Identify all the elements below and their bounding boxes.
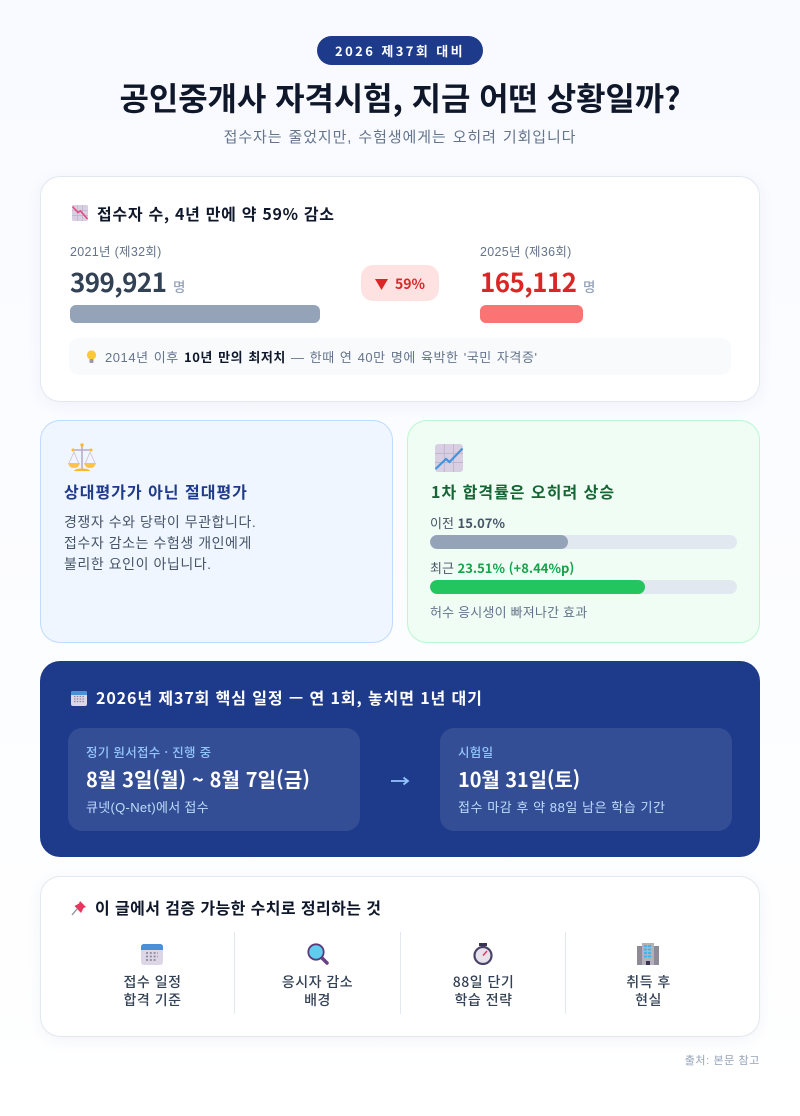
panel: pass rate xyxy=(407,420,760,643)
date: 10월 31일(토) xyxy=(458,764,580,793)
label: 2021: 2021년 (제32회) xyxy=(70,245,162,259)
icon: office building xyxy=(637,943,659,965)
value: 59%: 59% xyxy=(395,274,425,294)
date: 8월 3일(월) ~ 8월 7일(금) xyxy=(86,764,310,793)
icon: down triangle xyxy=(375,279,388,290)
bar fill: recent xyxy=(430,580,645,594)
icon: chart decreasing xyxy=(72,205,88,221)
label: 시험일 xyxy=(458,742,493,761)
label: recent: 최근 23.51% (+8.44%p) xyxy=(430,558,574,577)
detail: 큐넷(Q-Net)에서 접수 xyxy=(86,800,209,815)
heading: 이 글에서 검증 가능한 수치로 정리하는 것 xyxy=(95,895,381,919)
label xyxy=(453,972,514,1010)
label: 취득 후 xyxy=(626,972,671,992)
item: background xyxy=(235,932,401,1014)
source note: 출처: 본문 참고 xyxy=(685,1055,760,1067)
body text: 불리한 요인이 아닙니다. xyxy=(64,556,212,572)
body text: 경쟁자 수와 당락이 무관합니다. xyxy=(64,514,256,530)
box: application xyxy=(68,728,360,831)
icon: chart increasing xyxy=(435,444,463,472)
heading: 2026년 제37회 핵심 일정 — 연 1회, 놓치면 1년 대기 xyxy=(96,685,483,709)
panel: absolute evaluation xyxy=(40,420,393,643)
box: exam day xyxy=(440,728,732,831)
heading: 상대평가가 아닌 절대평가 xyxy=(64,479,248,503)
body text: 접수자 감소는 수험생 개인에게 xyxy=(64,535,252,551)
label xyxy=(124,972,181,1010)
label: 응시자 감소 xyxy=(282,972,353,992)
note text: 2014년 이후 10년 만의 최저치 — 한때 연 40만 명에 육박한 '국민 자격증' xyxy=(105,347,537,366)
icon: balance scale xyxy=(68,443,96,471)
label: 현실 xyxy=(635,990,662,1010)
note: 허수 응시생이 빠져나간 효과 xyxy=(430,605,587,620)
bar: 2021 xyxy=(70,305,320,323)
change badge xyxy=(361,265,439,301)
item: reality xyxy=(626,943,671,1010)
label: 학습 전략 xyxy=(455,990,512,1010)
heading: 1차 합격률은 오히려 상승 xyxy=(431,479,615,503)
badge: 2026 제37회 대비: 2026 제37회 대비 xyxy=(335,41,465,60)
panel: topics xyxy=(40,876,760,1037)
icon: calendar xyxy=(141,944,163,965)
arrow xyxy=(391,776,410,786)
note xyxy=(69,338,731,375)
bar: 2025 xyxy=(480,305,583,323)
badge: 2026 제37회 대비 xyxy=(317,36,483,65)
item: schedule xyxy=(70,932,235,1014)
panel: applicant decline xyxy=(40,176,760,402)
subtitle: 접수자는 줄었지만, 수험생에게는 오히려 기회입니다 xyxy=(224,129,576,146)
label: previous: 이전 15.07% xyxy=(430,513,505,532)
value: 399,921: 399,921 명 xyxy=(70,263,185,300)
icon: light bulb xyxy=(86,350,96,363)
label: 88일 단기 xyxy=(453,972,514,992)
label: 배경 xyxy=(304,990,331,1010)
icon: pushpin xyxy=(72,901,86,916)
item: strategy xyxy=(401,932,566,1014)
label xyxy=(282,972,353,1010)
body text xyxy=(64,514,256,572)
icon: stopwatch xyxy=(473,943,493,965)
bar: previous xyxy=(430,535,737,549)
stat: 2021 xyxy=(70,245,320,323)
icon: magnifier xyxy=(307,943,329,965)
bar: recent xyxy=(430,580,737,594)
value: 165,112: 165,112 명 xyxy=(480,263,595,300)
label: 정기 원서접수 · 진행 중 xyxy=(86,742,211,761)
title: 공인중개사 자격시험, 지금 어떤 상황일까? xyxy=(120,74,680,120)
bar fill: previous xyxy=(430,535,568,549)
label: 접수 일정 xyxy=(124,972,181,992)
detail: 접수 마감 후 약 88일 남은 학습 기간 xyxy=(458,800,666,815)
label: 합격 기준 xyxy=(124,990,181,1010)
stat: 2025 xyxy=(480,245,595,323)
heading: 접수자 수, 4년 만에 약 59% 감소 xyxy=(97,201,335,225)
label xyxy=(626,972,671,1010)
icon: calendar xyxy=(71,691,87,706)
panel: schedule xyxy=(40,661,760,857)
label: 2025: 2025년 (제36회) xyxy=(480,245,572,259)
